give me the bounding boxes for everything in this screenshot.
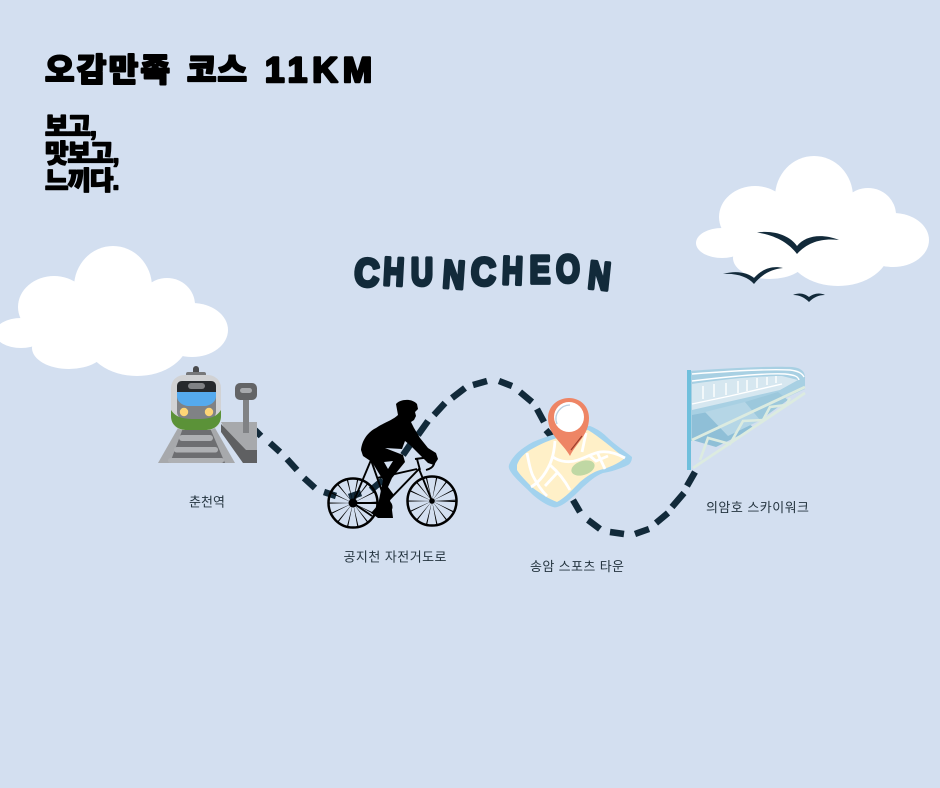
label: 송암 스포츠 타운: 송암 스포츠 타운 (530, 556, 624, 575)
heading: CHUNCHEON: N (441, 253, 466, 298)
subtitle: three-line tagline (45, 114, 118, 196)
heading: CHUNCHEON: O (556, 247, 580, 291)
heading: CHUNCHEON: H (501, 250, 524, 293)
cloud: right (696, 156, 929, 286)
heading: CHUNCHEON: C (470, 250, 497, 294)
title: 코스 (187, 52, 247, 88)
label: 의암호 스카이워크: 의암호 스카이워크 (706, 497, 809, 516)
subtitle: three-line tagline: 맛보고, (45, 140, 118, 168)
title: 11KM (265, 51, 372, 90)
title (45, 51, 372, 90)
icon: train station (158, 366, 257, 463)
label: 공지천 자전거도로: 공지천 자전거도로 (344, 546, 447, 566)
heading: CHUNCHEON (353, 247, 613, 299)
heading: CHUNCHEON: U (411, 250, 433, 294)
icon: skywalk bridge (687, 367, 805, 470)
icon: three birds (723, 232, 839, 302)
heading: CHUNCHEON: H (382, 250, 405, 295)
subtitle: three-line tagline: 보고, (45, 114, 96, 142)
icon: cyclist on bicycle (328, 400, 456, 528)
label: 춘천역: 춘천역 (189, 492, 225, 510)
heading: CHUNCHEON: E (530, 249, 550, 292)
subtitle: three-line tagline: 느끼다. (45, 168, 118, 196)
icon: map with location pin (509, 398, 632, 507)
dashed route line (255, 381, 695, 534)
title: 오감만족 (45, 52, 170, 88)
heading: CHUNCHEON: N (586, 253, 613, 299)
heading: CHUNCHEON: C (353, 250, 381, 295)
cloud: left (0, 246, 228, 376)
